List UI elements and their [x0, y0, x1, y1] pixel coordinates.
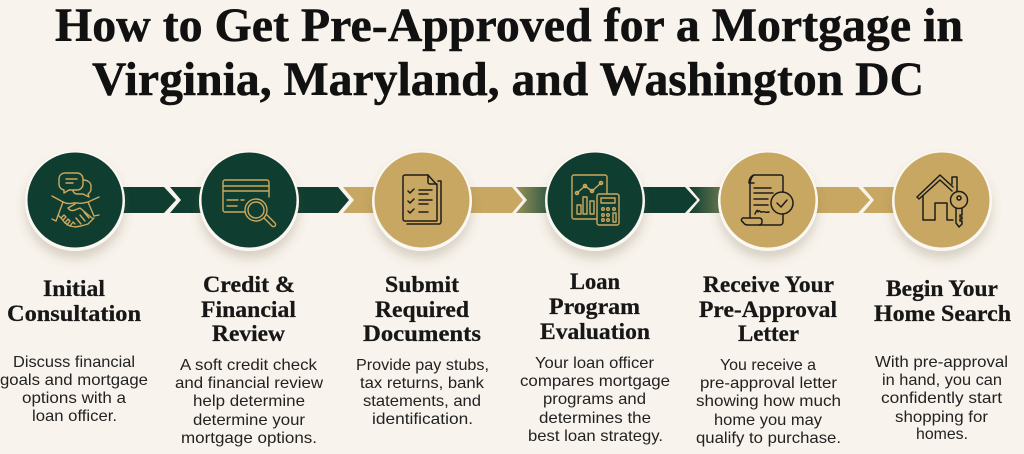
- panel: step 2 credit and financial review: [175, 151, 323, 447]
- description: step 4: Your loan officer: [535, 355, 655, 372]
- title: [55, 0, 963, 106]
- heading: step 2: Credit &: [203, 272, 295, 297]
- panel: step 3 submit required documents: [356, 151, 489, 428]
- panel: step 5 receive pre-approval letter: [696, 151, 841, 447]
- description: step 2: help determine: [193, 393, 305, 410]
- heading: step 1: Initial: [43, 276, 105, 301]
- description: step 5: You receive a: [720, 357, 816, 374]
- description: step 3: statements, and: [363, 393, 481, 410]
- heading: step 4: Loan: [570, 269, 620, 294]
- heading: step 3: [363, 272, 481, 346]
- heading: step 2: [201, 272, 296, 346]
- description: step 5: [696, 357, 841, 447]
- description: step 4: compares mortgage: [520, 373, 670, 390]
- panel: step 6 begin home search: [874, 151, 1011, 443]
- icon: house with key: [917, 175, 968, 227]
- description: step 5: pre-approval letter: [700, 375, 838, 392]
- badge: step 1: [25, 151, 125, 251]
- icon: signed letter with check badge: [741, 175, 793, 225]
- description: step 5: home you may: [714, 412, 822, 429]
- panel: step 1 initial consultation: [0, 151, 148, 425]
- badge: step 4: [545, 151, 645, 251]
- heading: step 3: Required: [375, 297, 469, 322]
- description: step 3: Provide pay stubs,: [356, 357, 489, 374]
- icon: chart and calculator: [572, 175, 619, 225]
- description: step 2: [175, 357, 323, 447]
- badge: step 3: [372, 151, 472, 251]
- heading: step 5: Letter: [738, 321, 799, 346]
- badge: step 6: [892, 151, 992, 251]
- arrow: step 5 to step 6: [800, 187, 915, 213]
- description: step 3: tax returns, bank: [360, 375, 485, 392]
- heading: step 6: [874, 276, 1011, 326]
- heading: step 5: Receive Your: [703, 272, 834, 297]
- description: step 4: programs and: [543, 391, 646, 408]
- description: step 6: homes.: [916, 426, 968, 443]
- description: step 1: [0, 354, 148, 425]
- arrow: step 1 to step 2: [110, 187, 230, 213]
- heading: step 5: Pre-Approval: [699, 297, 837, 322]
- description: step 4: [520, 355, 670, 445]
- heading: step 6: Begin Your: [886, 276, 998, 301]
- heading: step 3: Documents: [363, 321, 481, 346]
- description: step 2: mortgage options.: [181, 430, 317, 447]
- description: step 1: goals and mortgage: [0, 372, 148, 389]
- heading: step 4: Program: [549, 294, 640, 319]
- description: step 4: best loan strategy.: [528, 428, 663, 445]
- heading: step 4: [540, 269, 650, 344]
- icon: handshake with chat bubbles: [52, 173, 99, 227]
- heading: step 1: Consultation: [7, 301, 141, 326]
- description: step 6: With pre-approval: [875, 354, 1008, 371]
- description: step 3: [356, 357, 489, 428]
- heading: step 1: [7, 276, 141, 326]
- heading: step 2: Review: [212, 321, 285, 346]
- badge: step 2: [199, 151, 299, 251]
- badge: step 5: [718, 151, 818, 251]
- title: Virginia, Maryland, and Washington DC: [92, 53, 924, 106]
- description: step 6: confidently start: [881, 390, 1003, 407]
- arrow: step 2 to step 3: [285, 187, 400, 213]
- description: step 6: [875, 354, 1008, 443]
- title: How to Get Pre-Approved for a Mortgage in: [55, 0, 963, 52]
- description: step 6: shopping for: [895, 409, 989, 426]
- description: step 6: in hand, you can: [882, 372, 1002, 389]
- description: step 3: identification.: [372, 411, 473, 428]
- icon: checklist document: [403, 175, 441, 224]
- description: step 2: and financial review: [175, 375, 323, 392]
- description: step 2: A soft credit check: [180, 357, 318, 374]
- icon: credit card with magnifier: [223, 180, 276, 227]
- description: step 1: Discuss financial: [13, 354, 135, 371]
- description: step 5: qualify to purchase.: [696, 430, 841, 447]
- description: step 1: loan officer.: [32, 408, 117, 425]
- heading: step 5: [699, 272, 837, 346]
- heading: step 2: Financial: [201, 297, 296, 322]
- heading: step 4: Evaluation: [540, 319, 650, 344]
- arrow: step 4 to step 5: [625, 187, 722, 213]
- arrow: step 3 to step 4: [450, 187, 550, 213]
- description: step 4: determines the: [539, 410, 651, 427]
- description: step 2: determine your: [193, 412, 306, 429]
- description: step 1: options with a: [22, 390, 126, 407]
- heading: step 3: Submit: [385, 272, 459, 297]
- description: step 5: showing how much: [696, 393, 841, 410]
- heading: step 6: Home Search: [874, 301, 1011, 326]
- panel: step 4 loan program evaluation: [520, 151, 670, 445]
